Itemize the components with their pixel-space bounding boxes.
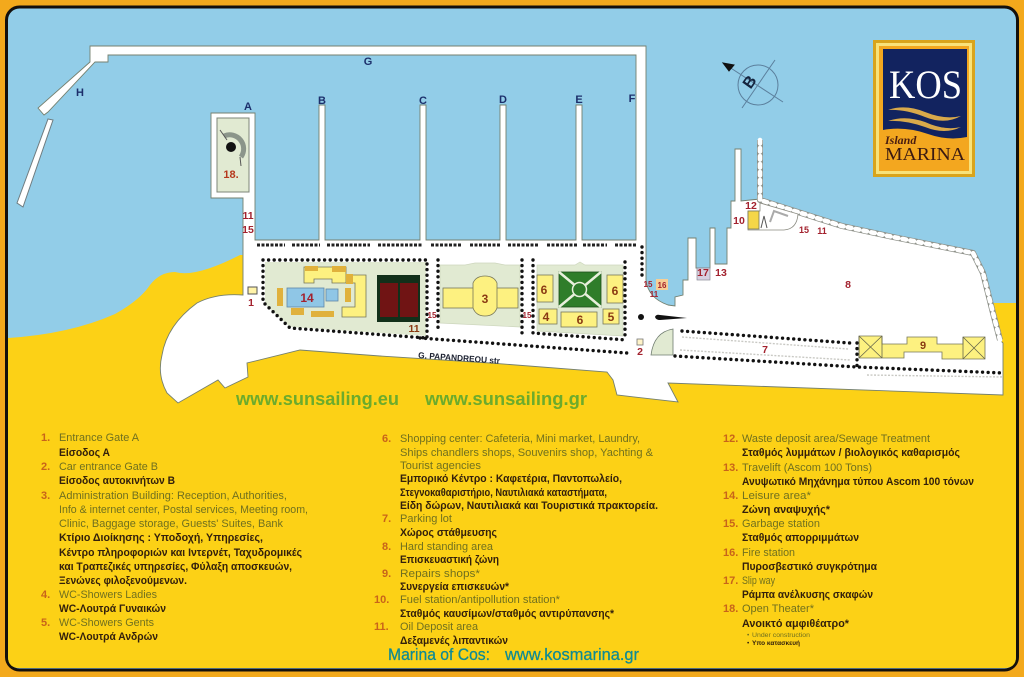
fire station badge	[656, 279, 668, 290]
marina website: www.kosmarina.gr	[504, 645, 639, 664]
panel: shopping center zone: 6	[541, 283, 548, 297]
map number labels: 15	[644, 280, 653, 289]
legend column 3: 16.	[723, 547, 738, 559]
legend column 3: 17.	[723, 575, 738, 587]
map number labels: 15	[523, 311, 532, 320]
legend column 1: Info & internet center, Postal services, Meeting room,	[59, 504, 308, 516]
legend column 2: Shopping center: Cafeteria, Mini market, Laundry,	[400, 433, 640, 445]
rock armour breakwater	[760, 140, 1000, 340]
legend column 2: Εμπορικό Κέντρο : Καφετέρια, Παντοπωλείο,	[400, 473, 622, 485]
dotted road fences	[263, 247, 1003, 373]
map number labels: 2	[637, 346, 643, 358]
quay service line	[257, 244, 636, 246]
map number labels: 15	[242, 224, 254, 236]
legend column 2: Συνεργεία επισκευών*	[400, 581, 510, 593]
leisure terraces	[277, 266, 353, 317]
legend column 3: Slip way	[742, 575, 775, 587]
legend column 3: Σταθμός απορριμμάτων	[742, 532, 859, 544]
legend column 2: Στεγνοκαθαριστήριο, Ναυτιλιακά καταστήματα,	[400, 487, 607, 499]
legend column 3: Υπο κατασκευή	[752, 640, 800, 647]
parking lot markings	[680, 337, 1003, 377]
pier letters	[76, 56, 636, 113]
legend column 1: Car entrance Gate B	[59, 461, 158, 473]
pier letters: D	[499, 94, 507, 106]
repair shops	[859, 336, 985, 359]
legend column 3: •	[747, 632, 750, 639]
legend column 2: Oil Deposit area	[400, 621, 479, 633]
legend column 2: Επισκευαστική ζώνη	[400, 554, 499, 566]
legend column 3: Fire station	[742, 547, 795, 559]
map number labels: 10	[733, 215, 745, 227]
panel: shopping center zone: 6	[612, 284, 619, 298]
legend column 3: 12.	[723, 433, 738, 445]
legend column 1: WC-Λουτρά Ανδρών	[59, 631, 158, 643]
marina website	[388, 645, 639, 664]
central garden	[559, 272, 601, 307]
legend column 3: Under construction	[752, 632, 810, 639]
legend column 3: •	[747, 640, 750, 647]
map number labels: 11	[650, 290, 659, 299]
panel: administration building zone: 3	[482, 292, 489, 306]
legend column 1: Είσοδος αυτοκινήτων Β	[59, 475, 175, 487]
legend column 1: Ξενώνες φιλοξενούμενων.	[59, 575, 187, 587]
gatehouse lawn	[651, 329, 673, 355]
legend column 2: Fuel station/antipollution station*	[400, 594, 561, 606]
legend column 1: Κτίριο Διοίκησης : Υποδοχή, Υπηρεσίες,	[59, 532, 263, 544]
legend column 3: Σταθμός λυμμάτων / βιολογικός καθαρισμός	[742, 447, 960, 459]
open theater	[217, 118, 249, 192]
street name: G. PAPANDREOU str	[418, 350, 501, 366]
legend column 1: WC-Λουτρά Γυναικών	[59, 603, 166, 615]
slip way	[697, 268, 710, 280]
map number labels: 11	[817, 226, 827, 236]
sand area	[8, 255, 1016, 668]
legend column 3: Ράμπα ανέλκυσης σκαφών	[742, 589, 873, 601]
pier letters: E	[575, 94, 583, 106]
detached breakwater	[17, 119, 53, 207]
legend column 1	[41, 432, 308, 643]
open theater: 18.	[223, 169, 239, 181]
legend column 3: Leisure area*	[742, 490, 812, 502]
legend column 1: 3.	[41, 490, 50, 502]
map number labels: 11	[408, 323, 420, 335]
legend column 2: 8.	[382, 541, 391, 553]
swimming pools	[287, 288, 338, 307]
compass	[723, 60, 783, 108]
legend column 3: Garbage station	[742, 518, 820, 530]
repair shops: 9	[920, 340, 926, 352]
pier letters: A	[244, 101, 252, 113]
panel: administration building zone	[440, 263, 520, 327]
panel: leisure area: 14	[300, 291, 314, 305]
legend column 2: 6.	[382, 433, 391, 445]
pier letters: H	[76, 87, 84, 99]
marina land and piers	[38, 46, 1003, 403]
map number labels: 11	[242, 210, 254, 222]
legend column 2: 10.	[374, 594, 389, 606]
logo navy field	[883, 49, 967, 138]
entrance traffic arrow	[638, 314, 687, 320]
legend column 3: Open Theater*	[742, 603, 815, 615]
map number labels: 7	[762, 344, 768, 356]
panel: shopping center zone: 4	[543, 310, 550, 324]
legend column 1: και Τραπεζικές υπηρεσίες, Φύλαξη αποσκευών,	[59, 561, 292, 573]
legend column 3: Travelift (Ascom 100 Tons)	[742, 462, 872, 474]
legend column 1: 2.	[41, 461, 50, 473]
legend column 3	[723, 433, 974, 647]
website links: www.sunsailing.gr	[424, 389, 587, 409]
legend column 3: 13.	[723, 462, 738, 474]
map number labels: 12	[745, 200, 757, 212]
legend column 3: Πυροσβεστικό συγκρότημα	[742, 561, 877, 573]
legend column 1: 5.	[41, 617, 50, 629]
legend column 3: 18.	[723, 603, 738, 615]
legend column 1: WC-Showers Gents	[59, 617, 154, 629]
map number labels: 17	[697, 267, 709, 279]
leisure buildings	[304, 267, 366, 317]
website links: www.sunsailing.eu	[235, 389, 399, 409]
logo: Kos Island Marina: KOS	[889, 62, 962, 107]
legend column 2: Tourist agencies	[400, 460, 481, 472]
legend column 1: Administration Building: Reception, Authorities,	[59, 490, 287, 502]
map number labels: 1	[248, 297, 254, 309]
panel: shopping center zone: 6	[577, 313, 584, 327]
map number labels: 8	[845, 279, 851, 291]
legend column 1: 4.	[41, 589, 50, 601]
pier letters: C	[419, 95, 427, 107]
legend column 1: Κέντρο πληροφοριών και Ιντερνέτ, Ταχυδρομικές	[59, 547, 302, 559]
legend column 1: Είσοδος Α	[59, 447, 110, 459]
map number labels	[242, 200, 851, 358]
map number labels: 15	[799, 225, 809, 235]
legend column 3: Ανυψωτικό Μηχάνημα τύπου Ascom 100 τόνων	[742, 476, 974, 488]
legend column 3: Ανοικτό αμφιθέατρο*	[742, 618, 850, 630]
legend column 1: Clinic, Baggage storage, Guests' Suites, Bank	[59, 518, 283, 530]
legend column 3: Ζώνη αναψυχής*	[742, 504, 831, 516]
legend column 2: Ships chandlers shops, Souvenirs shop, Yachting &	[400, 447, 654, 459]
website links	[235, 389, 587, 409]
legend column 2: 11.	[374, 621, 389, 633]
legend column 2: Repairs shops*	[400, 568, 481, 580]
legend column 1: WC-Showers Ladies	[59, 589, 157, 601]
marina website: Marina of Cos:	[388, 645, 490, 664]
legend column 2: Parking lot	[400, 513, 452, 525]
legend column 2: Χώρος στάθμευσης	[400, 527, 497, 539]
car entrance gate B marker	[637, 339, 643, 345]
panel: leisure area	[265, 262, 426, 336]
legend column 3: 15.	[723, 518, 738, 530]
pier letters: F	[629, 93, 636, 105]
compass: B	[740, 73, 761, 92]
legend column 3: Waste deposit area/Sewage Treatment	[742, 433, 930, 445]
tennis courts	[377, 275, 420, 322]
logo: Kos Island Marina: MARINA	[885, 144, 965, 164]
legend column 2: 9.	[382, 568, 391, 580]
map number labels: 15	[428, 311, 437, 320]
logo: Kos Island Marina: Island	[884, 133, 917, 147]
pier letters: B	[318, 95, 326, 107]
map number labels: 16	[658, 281, 667, 290]
legend column 3: 14.	[723, 490, 738, 502]
panel: shopping center zone	[537, 262, 623, 336]
legend column 2: Hard standing area	[400, 541, 494, 553]
legend column 2: Σταθμός καυσίμων/σταθμός αντιρύπανσης*	[400, 608, 615, 620]
legend column 1: 1.	[41, 432, 50, 444]
legend column 2	[374, 433, 658, 647]
legend column 2: 7.	[382, 513, 391, 525]
entrance gate A marker	[248, 287, 257, 294]
legend column 2: Δεξαμενές λιπαντικών	[400, 635, 508, 647]
map number labels: 13	[715, 267, 727, 279]
logo waves	[888, 107, 961, 131]
logo: Kos Island Marina	[873, 40, 975, 177]
panel: shopping center zone: 5	[608, 310, 615, 324]
shop buildings	[537, 275, 623, 327]
legend column 1: Entrance Gate A	[59, 432, 140, 444]
fuel station	[748, 203, 798, 230]
legend column 2: Είδη δώρων, Ναυτιλιακά και Τουριστικά πρακτορεία.	[400, 500, 658, 512]
pier letters: G	[364, 56, 372, 68]
